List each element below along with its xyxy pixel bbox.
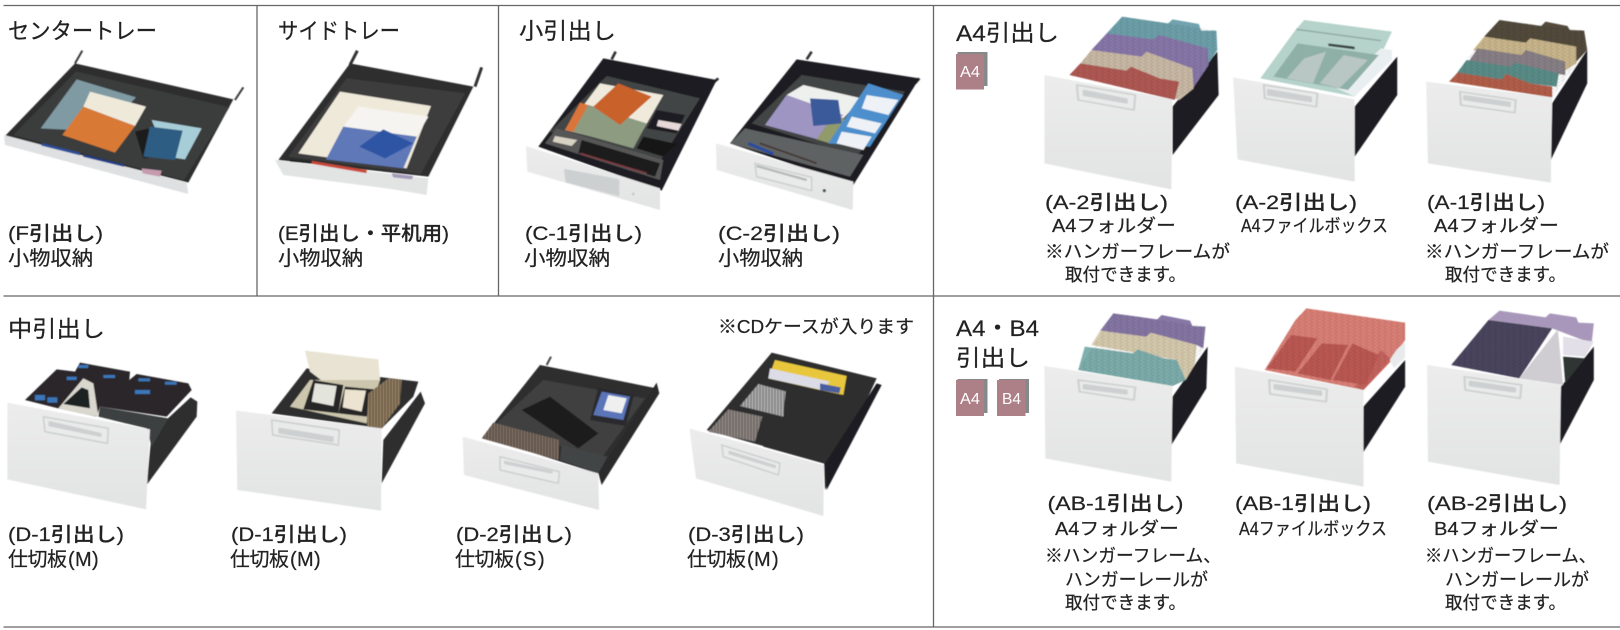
caption: B4 folder: B4フォルダー xyxy=(1434,519,1559,539)
caption: C-1 drawer: (C-1引出し) xyxy=(525,223,642,245)
heading: medium drawers: 中引出し xyxy=(8,317,105,342)
heading: side tray: サイドトレー xyxy=(278,19,400,44)
icon: A4 size badge xyxy=(956,379,988,416)
note: hanger frame: ※ハンガーフレーム、 xyxy=(1045,546,1221,566)
caption: AB-1 drawer: (AB-1引出し) xyxy=(1235,493,1371,515)
heading: drawers: 引出し xyxy=(956,346,1030,371)
caption: AB-2 drawer: (AB-2引出し) xyxy=(1427,493,1567,515)
caption: AB-1 drawer: (AB-1引出し) xyxy=(1048,493,1184,515)
caption: small items: 小物収納 xyxy=(524,247,610,270)
icon: A4 size badge xyxy=(956,52,988,90)
icon: A4 size badge: A4 xyxy=(960,64,980,81)
caption: A-2 drawer: (A-2引出し) xyxy=(1045,192,1168,214)
note: can be attached: 取付できます。 xyxy=(1445,593,1566,613)
caption: D-2 drawer: (D-2引出し) xyxy=(456,524,572,546)
illustration: A-1 drawer with A4 folders xyxy=(1426,20,1587,183)
caption: divider M: 仕切板(M) xyxy=(687,548,779,571)
panel: side tray xyxy=(275,19,482,270)
illustration: C-2 drawer xyxy=(716,52,919,210)
caption: small items: 小物収納 xyxy=(8,247,93,270)
heading: small drawers: 小引出し xyxy=(519,19,616,44)
caption: D-3 drawer: (D-3引出し) xyxy=(688,524,804,546)
panel: A4 and B4 drawers xyxy=(956,308,1596,613)
caption: A-1 drawer: (A-1引出し) xyxy=(1427,192,1545,214)
illustration: side tray with notepad xyxy=(275,51,482,195)
caption: small items: 小物収納 xyxy=(718,247,803,270)
panel: medium drawers xyxy=(7,317,914,571)
illustration: center tray with notepads xyxy=(4,51,243,194)
illustration: D-1 drawer with tape cases and CDs xyxy=(236,351,425,511)
note: can be attached: 取付できます。 xyxy=(1065,593,1186,613)
heading: A4 and B4: A4・B4 xyxy=(956,316,1039,341)
caption: A4 folder: A4フォルダー xyxy=(1055,519,1179,539)
note: hanger rail: ハンガーレールが xyxy=(1065,570,1208,590)
caption: D-1 drawer: (D-1引出し) xyxy=(231,524,347,546)
icon: B4 size badge xyxy=(997,379,1029,416)
caption: divider M: 仕切板(M) xyxy=(8,548,99,571)
illustration: AB-1 drawer with A4 folders xyxy=(1044,313,1208,482)
illustration: D-2 drawer xyxy=(463,357,659,510)
icon: B4 size badge: B4 xyxy=(1002,391,1021,408)
note: hanger frame: ※ハンガーフレームが xyxy=(1425,242,1609,262)
caption: D-1 drawer: (D-1引出し) xyxy=(8,524,124,546)
caption: A-2 drawer: (A-2引出し) xyxy=(1235,192,1357,214)
caption: A4 file box: A4ファイルボックス xyxy=(1239,519,1387,539)
caption: A4 folder: A4フォルダー xyxy=(1434,216,1559,236)
illustration: C-1 drawer xyxy=(526,52,718,210)
heading: center tray: センタートレー xyxy=(8,19,157,44)
illustration: AB-2 drawer with B4 folders xyxy=(1427,311,1594,485)
note: hanger frame: ※ハンガーフレーム、 xyxy=(1425,546,1596,566)
illustration: AB-1 drawer with A4 file boxes xyxy=(1235,308,1405,487)
panel: small drawers xyxy=(519,19,919,270)
caption: F drawer: (F引出し) xyxy=(8,223,103,245)
panel: center tray xyxy=(4,19,243,270)
caption: divider M: 仕切板(M) xyxy=(230,548,321,571)
note: can be attached: 取付できます。 xyxy=(1065,265,1186,285)
caption: A4 file box: A4ファイルボックス xyxy=(1241,216,1388,236)
illustration: D-3 drawer xyxy=(689,353,882,516)
illustration: A-2 drawer with A4 folders xyxy=(1044,17,1219,189)
note: can be attached: 取付できます。 xyxy=(1445,265,1566,285)
illustration: A-2 drawer with A4 file boxes xyxy=(1233,20,1397,182)
icon: A4 size badge: A4 xyxy=(960,391,980,408)
caption: divider S: 仕切板(S) xyxy=(455,548,545,571)
caption: C-2 drawer: (C-2引出し) xyxy=(718,223,840,245)
caption: E drawer and flat desk: (E引出し・平机用) xyxy=(278,223,449,245)
heading: A4 drawers: A4引出し xyxy=(956,21,1059,46)
note: hanger rail: ハンガーレールが xyxy=(1445,570,1589,590)
panel: A4 drawers xyxy=(956,17,1609,285)
illustration: D-1 drawer with boxes xyxy=(7,363,197,509)
caption: small items: 小物収納 xyxy=(278,247,363,270)
caption: A4 folder: A4フォルダー xyxy=(1052,216,1176,236)
note: hanger frame: ※ハンガーフレームが xyxy=(1045,242,1230,262)
note: CD cases fit: ※CDケースが入ります xyxy=(718,317,914,337)
